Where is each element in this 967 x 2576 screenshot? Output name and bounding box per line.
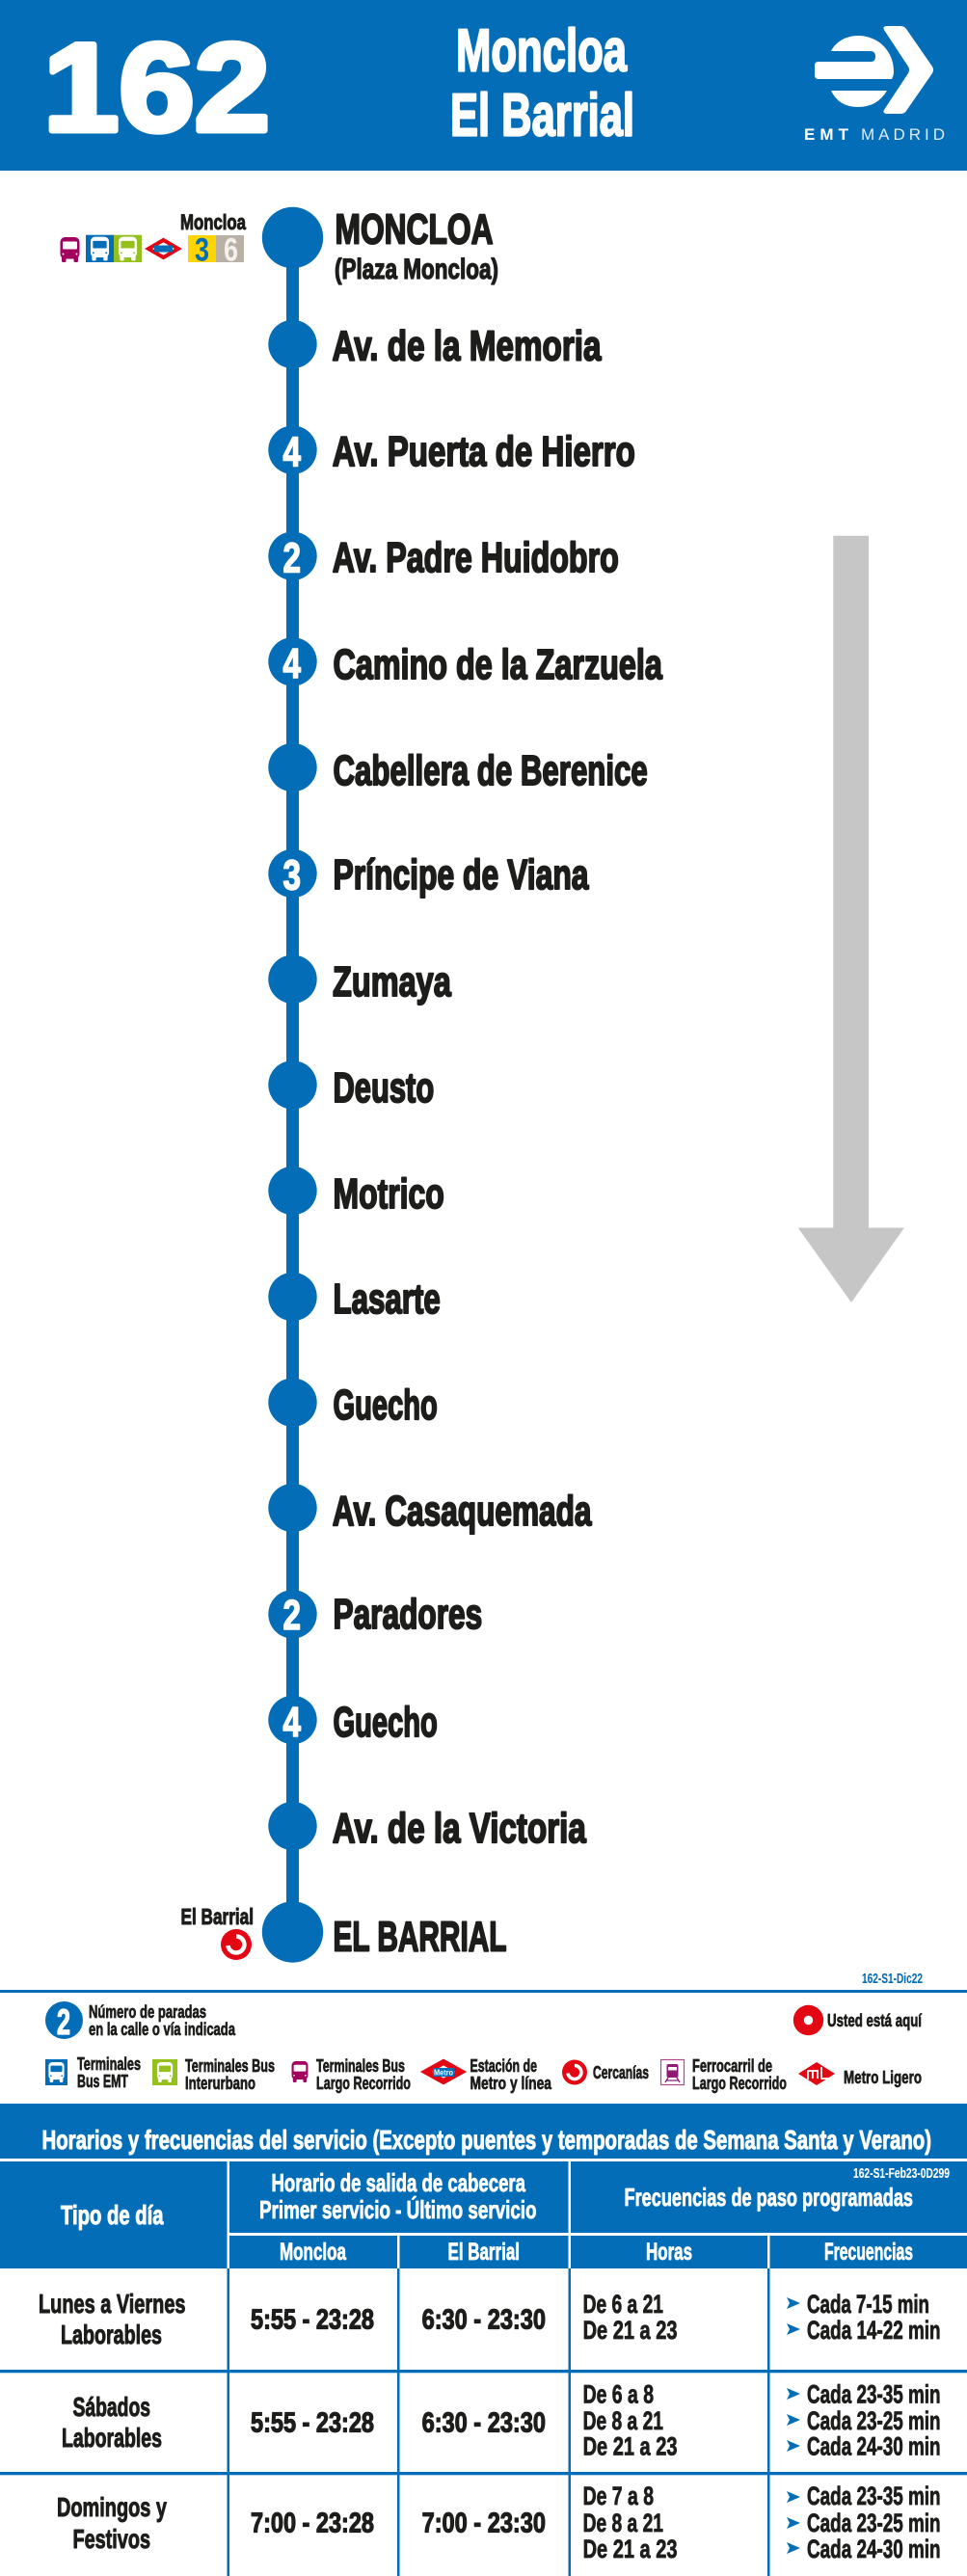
stop: Zumaya: Zumaya	[333, 958, 451, 1006]
row: Domingos y Festivos: De 21 a 23	[583, 2535, 677, 2563]
stop: Av. Casaquemada: Av. Casaquemada	[333, 1488, 592, 1535]
icon: EMT bus	[86, 235, 114, 262]
stop: Deusto	[268, 1060, 434, 1112]
row: Domingos y Festivos: Domingos y	[57, 2492, 167, 2522]
legend: interurban terminals: Terminales Bus	[185, 2056, 275, 2076]
row: Lunes a Viernes Laborables: De 21 a 23	[583, 2316, 677, 2345]
legend: long distance terminals: Terminales Bus	[316, 2056, 405, 2076]
row: Domingos y Festivos: 7:00 - 23:30	[422, 2509, 546, 2539]
legend: cercanías: Cercanías	[593, 2063, 649, 2082]
stop: Camino de la Zarzuela: 4	[283, 640, 301, 687]
legend: long distance terminals	[292, 2056, 411, 2093]
legend: long distance rail	[661, 2056, 787, 2093]
legend: long distance rail: Ferrocarril de	[692, 2056, 772, 2076]
icon: cercanías	[221, 1929, 252, 1960]
row: Sábados Laborables	[62, 2380, 941, 2461]
row: Lunes a Viernes Laborables: 6:30 - 23:30	[422, 2305, 546, 2336]
stop: Cabellera de Berenice: Cabellera de Berenice	[334, 747, 648, 794]
legend separator	[0, 1990, 967, 1993]
connections at El Barrial: El Barrial	[181, 1904, 254, 1929]
icon: EMT Madrid logo	[804, 26, 945, 144]
icon: long distance bus	[60, 237, 79, 262]
stop: Motrico: Motrico	[334, 1170, 444, 1218]
row: Domingos y Festivos	[57, 2482, 941, 2563]
legend: light rail: Metro Ligero	[844, 2068, 922, 2087]
legend: you are here	[793, 2005, 923, 2035]
connections at El Barrial	[181, 1904, 254, 1960]
stop: Guecho (second)	[268, 1696, 438, 1746]
stop: Moncloa terminal: (Plaza Moncloa)	[335, 254, 498, 285]
stop: Moncloa terminal	[262, 206, 498, 285]
stop: Príncipe de Viana	[268, 849, 589, 899]
stop: El Barrial terminal: EL BARRIAL	[334, 1913, 507, 1961]
table header: El Barrial	[447, 2239, 520, 2266]
stop: Zumaya	[268, 954, 451, 1006]
row: Lunes a Viernes Laborables: Lunes a Viernes	[39, 2289, 185, 2319]
row: Domingos y Festivos: 7:00 - 23:28	[251, 2509, 374, 2539]
legend: number of stops	[45, 2001, 236, 2042]
stop: Av. de la Memoria	[268, 320, 602, 370]
connections at Moncloa	[60, 210, 247, 268]
stop: Av. Puerta de Hierro: Av. Puerta de Hierro	[333, 428, 635, 475]
stop: Av. de la Victoria	[268, 1802, 586, 1852]
stop: Paradores: Paradores	[334, 1591, 482, 1638]
legend: EMT terminals: Terminales	[77, 2054, 141, 2074]
stop: Paradores	[268, 1590, 482, 1639]
stop: Av. Padre Huidobro: Av. Padre Huidobro	[333, 534, 619, 581]
route title: origin: Moncloa	[456, 17, 627, 85]
stop: Motrico	[268, 1167, 444, 1218]
header band	[0, 0, 967, 171]
stop: Av. Casaquemada	[268, 1484, 592, 1535]
row: Domingos y Festivos: Festivos	[73, 2524, 150, 2554]
row: Sábados Laborables: De 8 a 21	[583, 2406, 663, 2435]
legend: metro station	[426, 2056, 552, 2093]
table header: Moncloa	[280, 2239, 347, 2266]
table header: Horario de salida de cabecera	[272, 2168, 525, 2197]
route line	[286, 237, 299, 1932]
stop: Paradores: 2	[283, 1592, 301, 1639]
row: Lunes a Viernes Laborables: De 6 a 21	[583, 2290, 663, 2319]
icon: EMT Madrid logo: EMT	[804, 125, 849, 144]
legend: long distance rail: Largo Recorrido	[692, 2074, 787, 2093]
stop: Camino de la Zarzuela	[268, 637, 662, 688]
connections at Moncloa: Moncloa	[180, 210, 247, 234]
legend: interurban terminals	[152, 2056, 275, 2093]
stop: Guecho: Guecho	[334, 1382, 438, 1429]
timetable	[0, 2104, 967, 2576]
stop: Guecho (second): 4	[283, 1699, 301, 1746]
row: Sábados Laborables: De 6 a 8	[583, 2380, 654, 2409]
legend: light rail	[798, 2062, 922, 2087]
stop: Cabellera de Berenice	[268, 743, 648, 794]
stop: Av. de la Victoria: Av. de la Victoria	[333, 1805, 586, 1852]
row: Sábados Laborables: Laborables	[62, 2423, 162, 2453]
icon: EMT Madrid logo: MADRID	[861, 125, 945, 144]
legend: number of stops: Número de paradas	[89, 2002, 206, 2022]
table grid lines	[0, 2268, 967, 2576]
metro line 6 badge: 6	[224, 231, 238, 268]
table header: Primer servicio - Último servicio	[259, 2195, 536, 2224]
stop: Camino de la Zarzuela: Camino de la Zarzuela	[334, 641, 662, 688]
legend: EMT terminals: Bus EMT	[77, 2072, 128, 2091]
stop: Av. Padre Huidobro	[268, 532, 619, 582]
table title bar	[0, 2104, 967, 2159]
row: Lunes a Viernes Laborables: 5:55 - 23:28	[251, 2305, 374, 2336]
legend: EMT terminals	[45, 2054, 141, 2091]
direction arrow	[798, 536, 904, 1302]
metro line 6 badge	[216, 231, 244, 268]
legend: metro station: Metro y línea	[470, 2074, 552, 2093]
table header: Tipo de día	[61, 2200, 164, 2230]
stop: Av. Puerta de Hierro	[268, 426, 635, 476]
table header: Frecuencias	[824, 2239, 913, 2266]
stop: Príncipe de Viana: 3	[283, 852, 301, 899]
legend: long distance terminals: Largo Recorrido	[316, 2074, 411, 2093]
legend: metro station: Metro	[434, 2069, 453, 2077]
row: Domingos y Festivos: De 8 a 21	[583, 2509, 663, 2537]
row: Sábados Laborables: Sábados	[73, 2392, 150, 2422]
table header	[0, 2161, 967, 2268]
legend: you are here: Usted está aquí	[827, 2011, 923, 2030]
row: Sábados Laborables: 5:55 - 23:28	[251, 2408, 374, 2439]
stop: Lasarte	[268, 1273, 441, 1323]
stop: Lasarte: Lasarte	[334, 1275, 441, 1323]
line number: 162	[43, 17, 270, 158]
stop: Av. de la Memoria: Av. de la Memoria	[332, 322, 602, 370]
stop: Av. Puerta de Hierro: 4	[283, 428, 301, 476]
metro line 3 badge: 3	[195, 231, 209, 268]
row: Sábados Laborables: De 21 a 23	[583, 2432, 677, 2461]
icon: interurban bus	[114, 235, 142, 262]
legend: number of stops: 2	[57, 2002, 70, 2042]
stop: Guecho (second): Guecho	[334, 1699, 438, 1746]
metro line 3 badge	[188, 231, 216, 268]
row: Sábados Laborables: 6:30 - 23:30	[422, 2408, 546, 2439]
stop: Moncloa terminal: MONCLOA	[336, 206, 494, 253]
icon: metro diamond	[148, 240, 178, 257]
row: Domingos y Festivos: De 7 a 8	[583, 2482, 654, 2510]
row: Lunes a Viernes Laborables: Laborables	[61, 2320, 162, 2349]
stop: El Barrial terminal	[262, 1901, 507, 1963]
table header: Horas	[646, 2239, 692, 2266]
stop: Av. Padre Huidobro: 2	[283, 534, 301, 582]
version code: 162-S1-Dic22	[862, 1971, 923, 1987]
legend: number of stops: en la calle o vía indicada	[89, 2020, 236, 2039]
stop: Deusto: Deusto	[334, 1064, 434, 1112]
stop: Príncipe de Viana: Príncipe de Viana	[334, 851, 589, 899]
stop: Guecho	[268, 1379, 438, 1429]
legend: cercanías	[562, 2059, 649, 2084]
legend: interurban terminals: Interurbano	[185, 2074, 255, 2093]
route title: destination: El Barrial	[450, 83, 634, 148]
row: Lunes a Viernes Laborables	[39, 2289, 941, 2349]
legend: metro station: Estación de	[470, 2056, 537, 2076]
